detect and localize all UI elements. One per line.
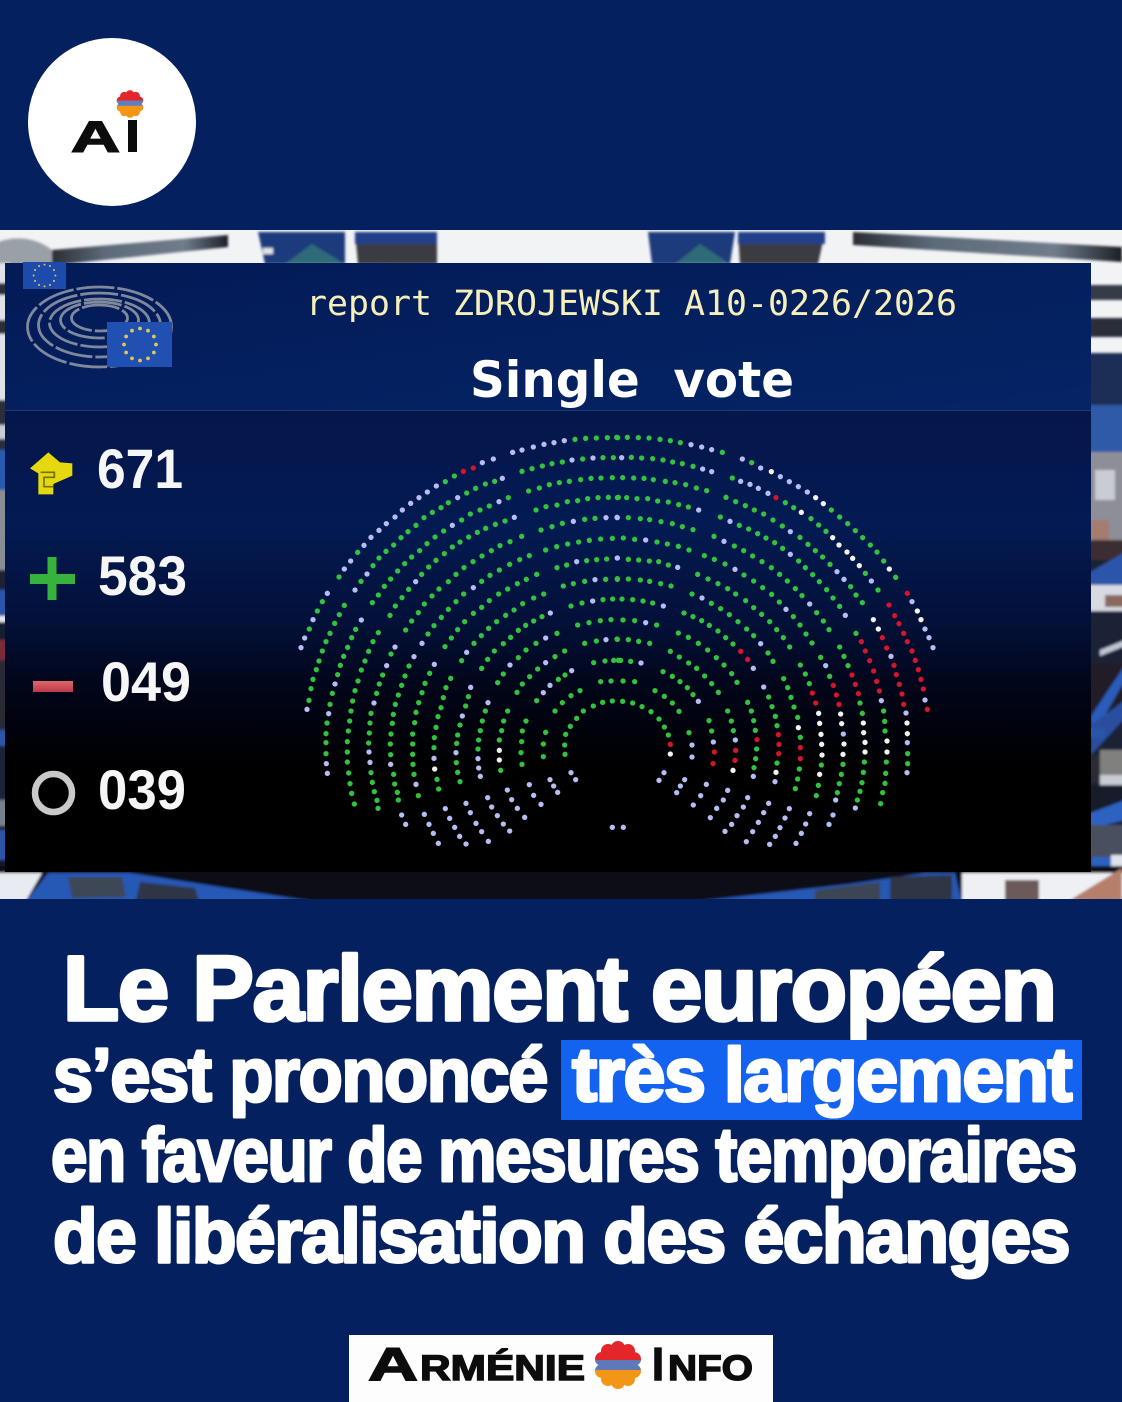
voting screen panel xyxy=(5,262,1091,872)
bottom strip xyxy=(0,866,1122,904)
background photo of the chamber xyxy=(0,230,1122,904)
count: votes against: 049 xyxy=(101,650,191,713)
left half of hemicycle xyxy=(301,438,618,844)
icon: red minus xyxy=(33,681,73,692)
heading: single vote: Single vote xyxy=(470,351,794,409)
report reference: report ZDROJEWSKI A10-0226/2026 xyxy=(306,284,957,324)
title: Le Parlement européen xyxy=(63,938,1057,1040)
left audience strip xyxy=(0,263,10,400)
logo badge: AI xyxy=(28,38,196,206)
icon: parliament hemicycle logo xyxy=(28,287,172,367)
count: votes for: 583 xyxy=(98,544,187,607)
EU flag xyxy=(107,322,172,367)
title xyxy=(51,938,1082,1279)
footer logo: Arménie Info: NFO xyxy=(668,1349,753,1388)
EU small flag xyxy=(23,262,66,289)
title: très largement xyxy=(572,1033,1072,1118)
top strip xyxy=(0,237,52,264)
right half of hemicycle xyxy=(612,437,933,844)
logo rosette xyxy=(116,90,144,118)
footer logo: Arménie Info xyxy=(349,1335,773,1402)
count: total voters: 671 xyxy=(97,437,183,500)
highlight box xyxy=(561,1040,1082,1120)
title: de libéralisation des échanges xyxy=(53,1194,1069,1279)
footer logo: Arménie Info: I xyxy=(652,1338,664,1390)
icon: abstention circle xyxy=(35,774,72,812)
icon: yellow arrow xyxy=(30,452,72,494)
footer logo: Arménie Info: RMÉNIE xyxy=(420,1348,585,1388)
logo letters AI: A xyxy=(71,112,120,162)
footer logo: Arménie Info: A xyxy=(368,1338,418,1390)
right audience strip xyxy=(1091,558,1122,868)
count: abstentions: 039 xyxy=(98,758,186,821)
title: s’est prononcé xyxy=(53,1033,547,1118)
rosette emblem xyxy=(595,1341,641,1389)
icon: green plus xyxy=(30,557,75,600)
hemicycle seating chart xyxy=(301,437,933,844)
